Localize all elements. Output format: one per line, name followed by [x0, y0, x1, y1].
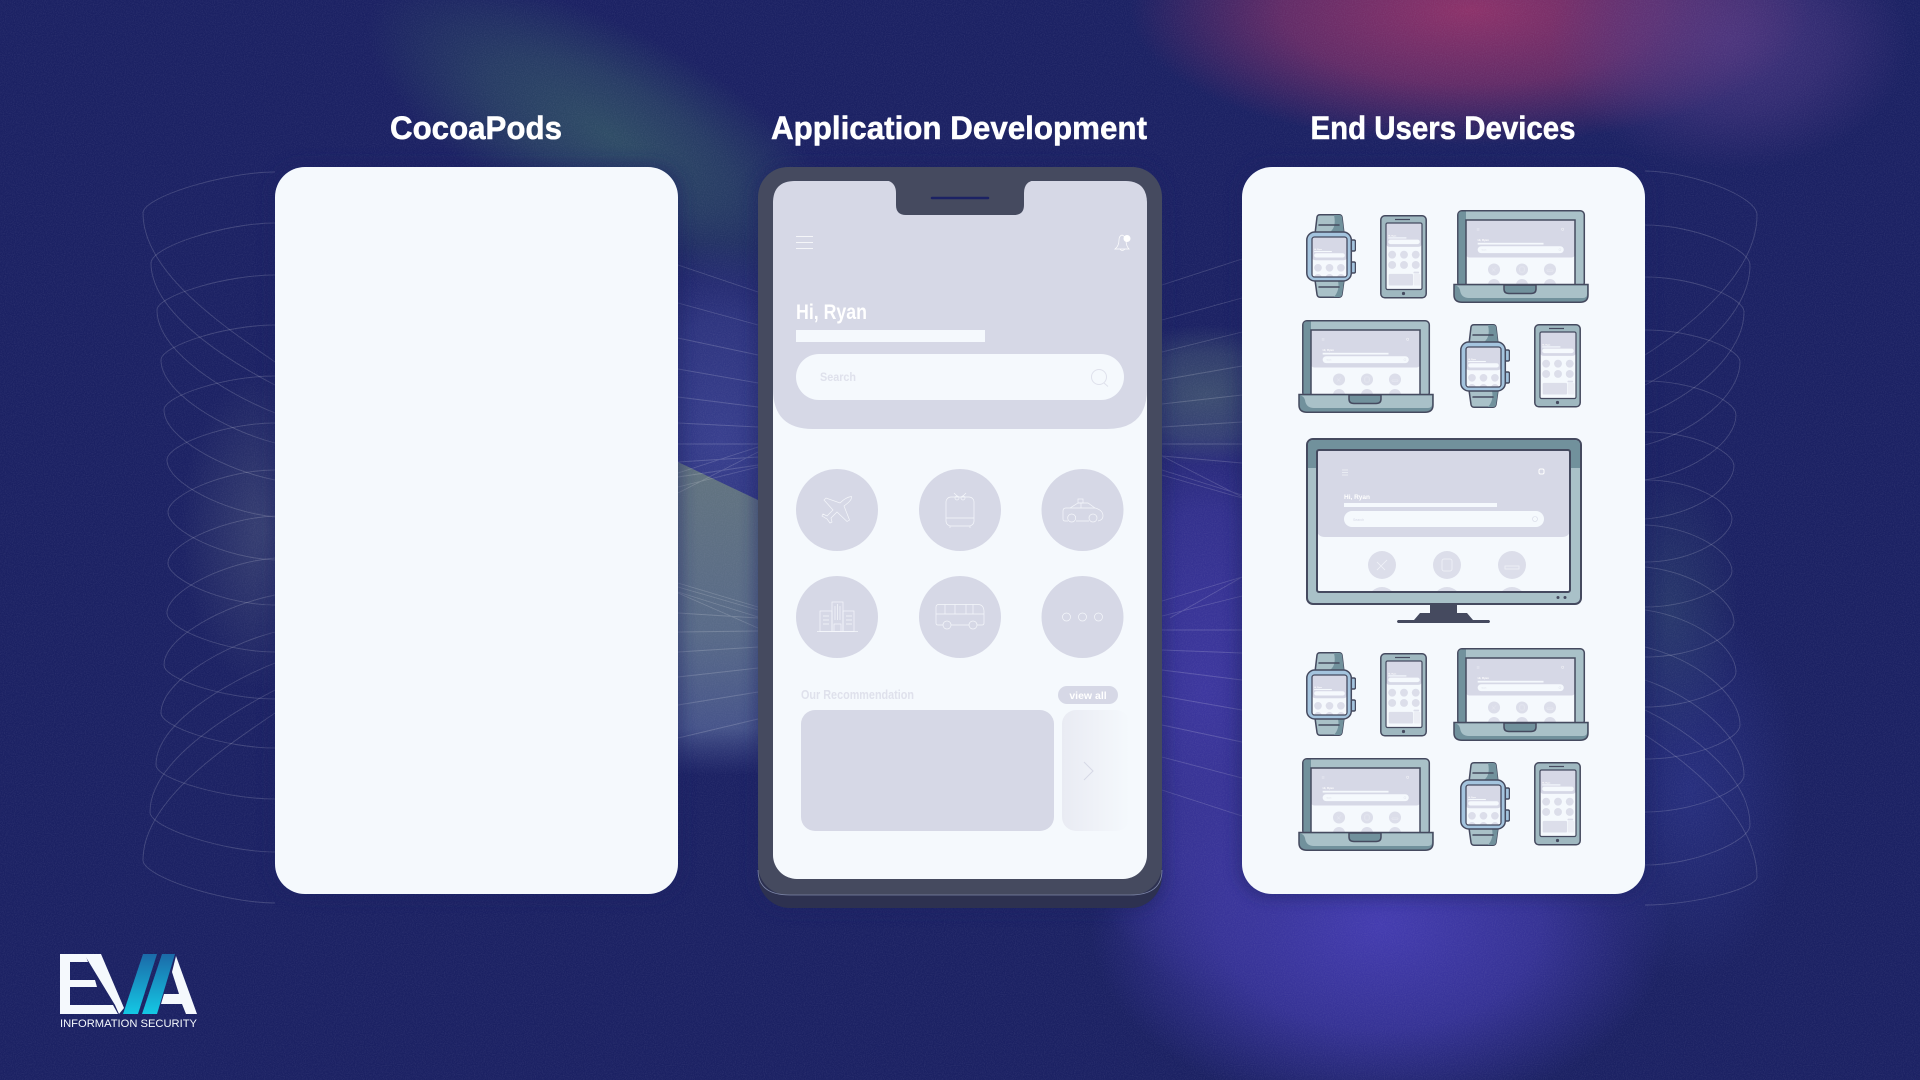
- orbit lines between phone and right panel: [1162, 259, 1242, 816]
- panel: end user devices: [1242, 167, 1645, 894]
- device: laptop: [1299, 321, 1433, 412]
- phone base: [758, 300, 1162, 908]
- search box: Search: [820, 370, 856, 384]
- device: phone: [1535, 325, 1580, 407]
- orbit lines between left panel and phone: [678, 265, 758, 738]
- icon: taxi: [1042, 469, 1124, 551]
- logo: EVA Information Security: INFORMATION SECURITY: [60, 1018, 198, 1030]
- icon: notification bell: [1115, 235, 1130, 250]
- heading: CocoaPods: CocoaPods: [390, 110, 562, 146]
- panel: phone mockup: [758, 167, 1162, 908]
- device: laptop: [1454, 211, 1588, 302]
- recommendation label: Our Recommendation: [801, 687, 914, 702]
- phone edge highlight: [758, 870, 1162, 895]
- orbit rings left: [143, 172, 275, 903]
- greeting: Hi, Ryan: [796, 301, 867, 324]
- logo: EVA Information Security: [60, 954, 198, 1030]
- panel: CocoaPods: [275, 167, 678, 894]
- device: phone: [1535, 763, 1580, 845]
- app header: [773, 181, 1147, 429]
- speaker: [932, 197, 988, 199]
- icon: tram: [919, 469, 1001, 551]
- device: phone: [1381, 216, 1426, 298]
- device: laptop: [1454, 649, 1588, 740]
- recommendation card: [801, 710, 1054, 831]
- panel shadows: [270, 162, 1650, 913]
- view all button: [1058, 686, 1118, 704]
- device: watch: [1461, 325, 1510, 412]
- subtitle bar: [796, 330, 985, 342]
- notch: [884, 180, 1036, 215]
- device: phone: [1381, 654, 1426, 736]
- device: watch: [1461, 763, 1510, 850]
- icon: more: [1042, 576, 1124, 658]
- heading: End Users Devices: End Users Devices: [1310, 110, 1576, 146]
- next card: [1062, 710, 1130, 831]
- device: watch: [1307, 215, 1356, 302]
- icon: menu: [796, 236, 813, 248]
- heading: Application Development: Application Development: [771, 110, 1147, 146]
- phone body: [758, 167, 1162, 895]
- phone screen: [773, 181, 1147, 879]
- search box: [796, 354, 1124, 400]
- icon: bus: [919, 576, 1001, 658]
- device: watch: [1307, 653, 1356, 740]
- icon: building: [796, 576, 878, 658]
- device: laptop: [1299, 759, 1433, 850]
- device: desktop monitor: [1307, 439, 1581, 623]
- orbit rings right: [1645, 171, 1757, 905]
- icon: plane: [796, 469, 878, 551]
- view all button: view all: [1069, 690, 1107, 702]
